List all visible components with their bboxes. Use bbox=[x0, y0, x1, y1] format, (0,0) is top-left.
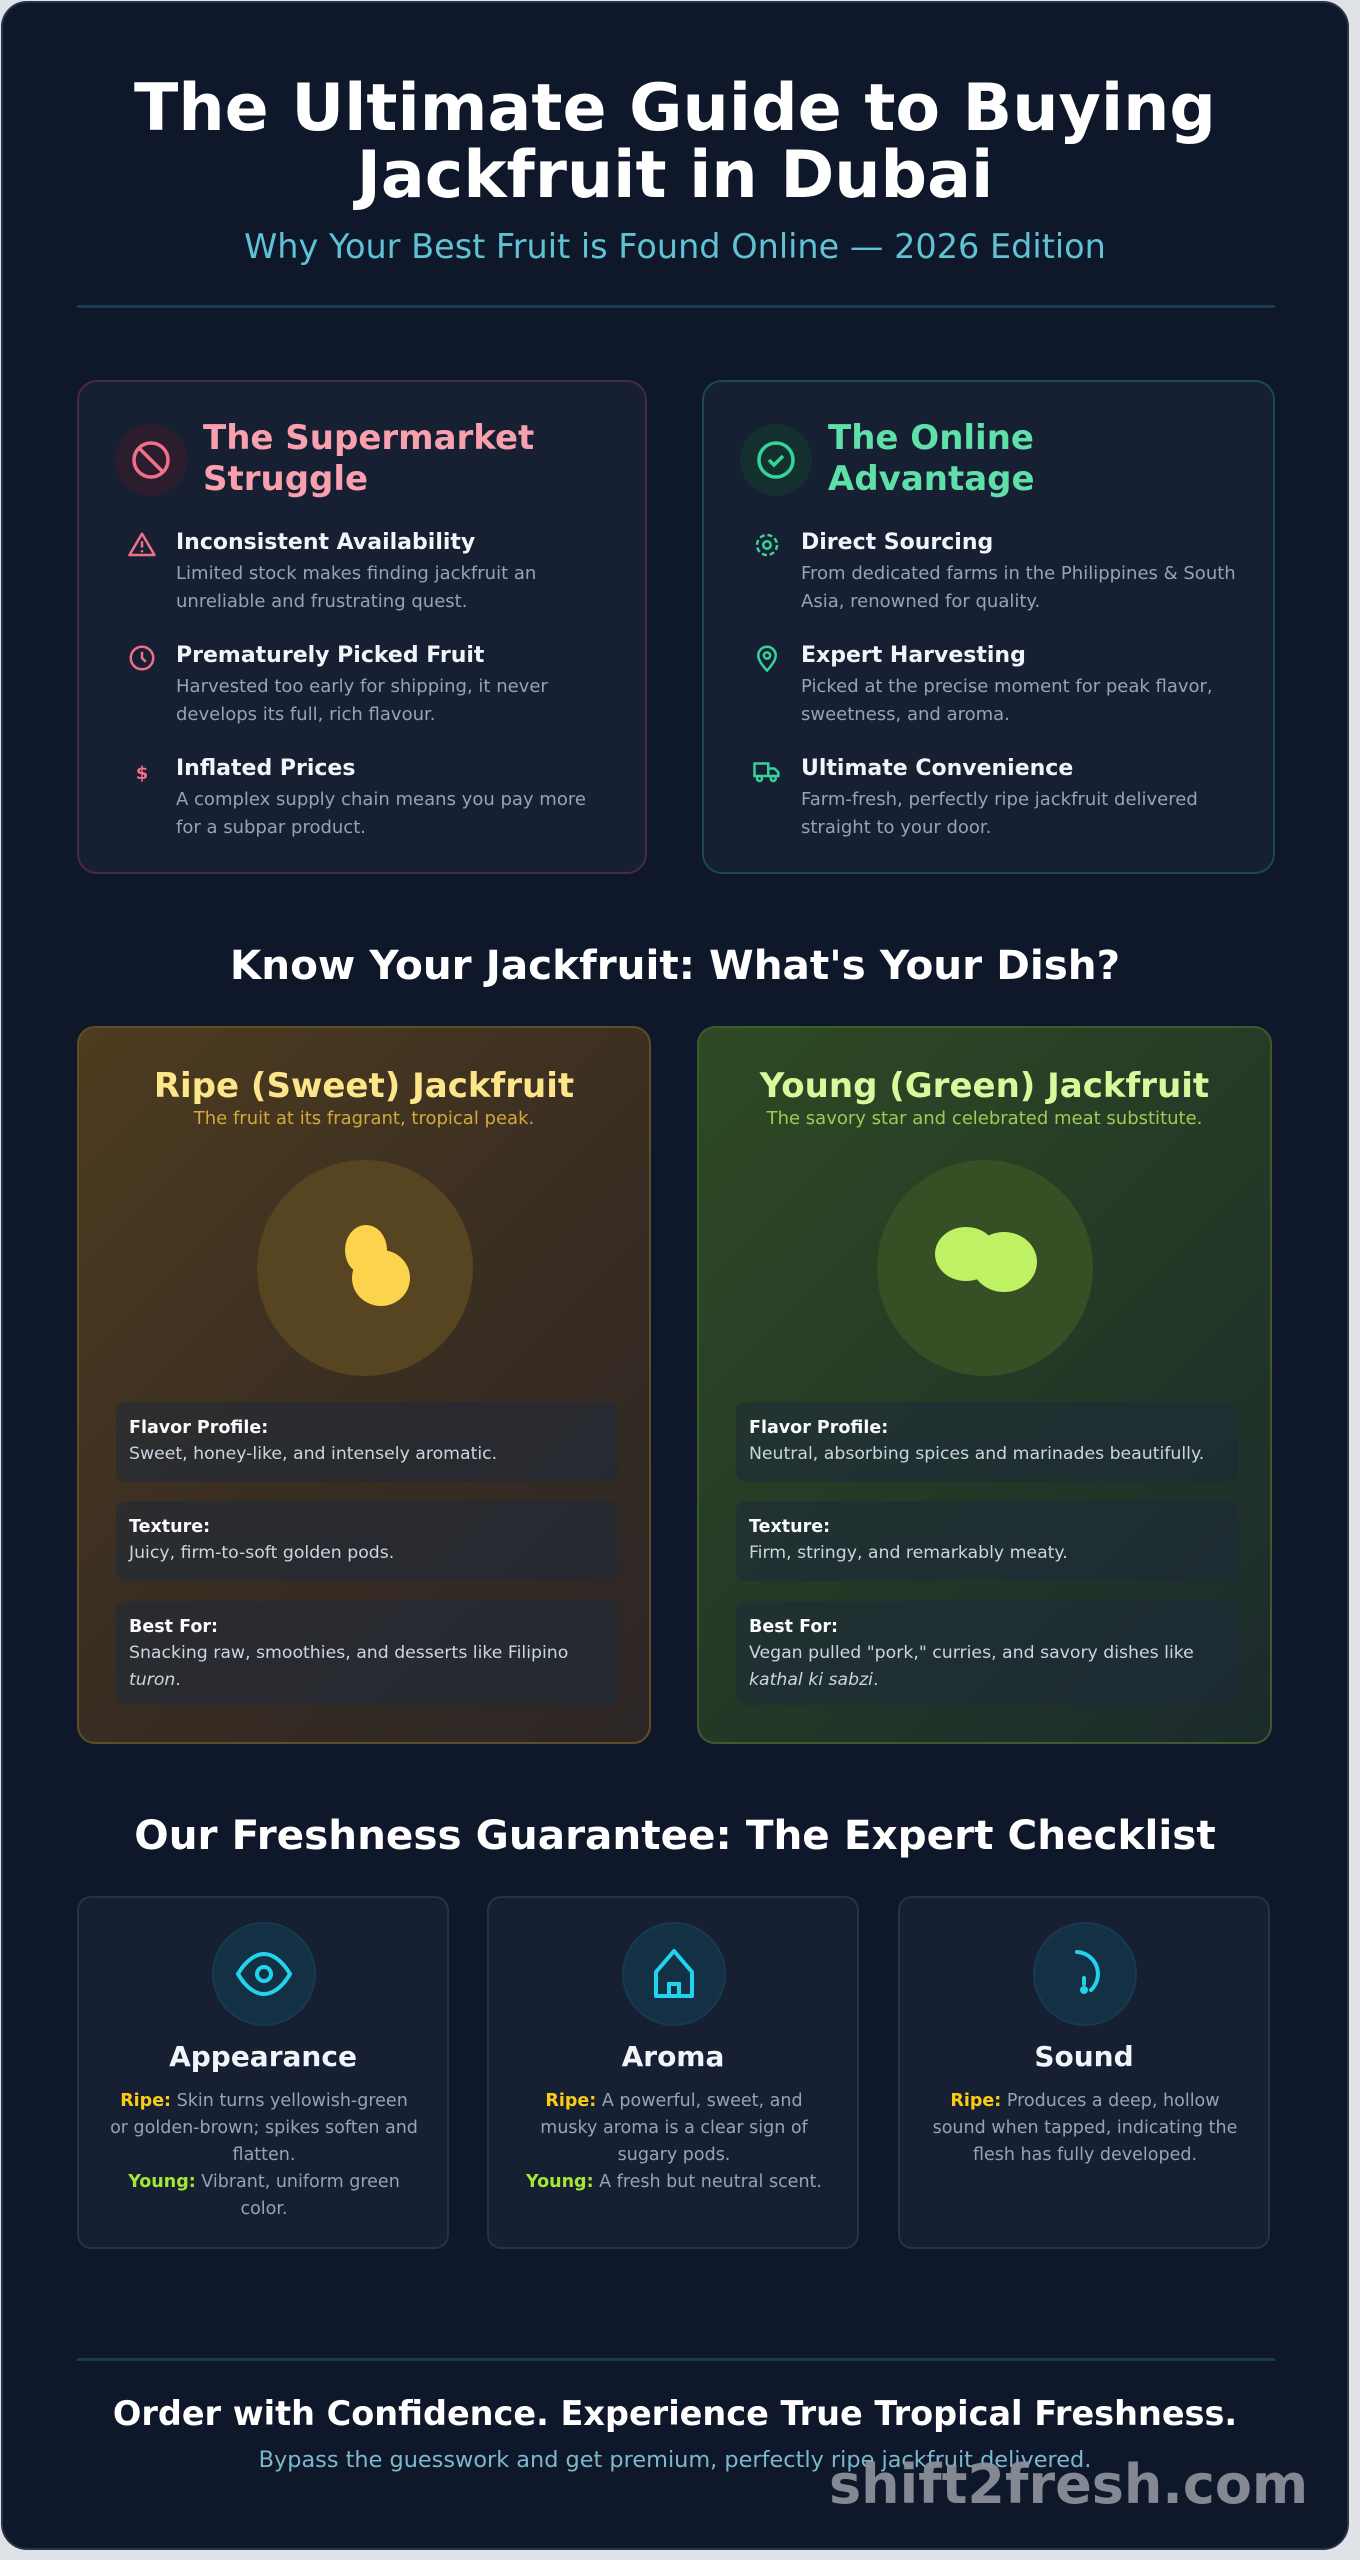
text: Young: Vibrant, uniform green color. bbox=[128, 2172, 400, 2219]
info: best for bbox=[116, 1601, 618, 1705]
info: best for: Best For: bbox=[749, 1617, 838, 1637]
item: sourcing: Direct Sourcing bbox=[801, 530, 993, 555]
item: convenience: Farm-fresh, perfectly ripe jackfruit delivered straight to your door. bbox=[801, 789, 1198, 838]
heading: The Supermarket bbox=[203, 418, 534, 458]
text bbox=[526, 2091, 822, 2192]
info: texture bbox=[116, 1501, 618, 1581]
icon: sound bbox=[1033, 1922, 1137, 2026]
item: prices: Inflated Prices bbox=[176, 756, 355, 781]
icon: eye bbox=[212, 1922, 316, 2026]
item: premature: Prematurely Picked Fruit bbox=[176, 643, 484, 668]
icon: prohibited bbox=[115, 424, 187, 496]
heading: freshness guarantee: Our Freshness Guarantee: The Expert Checklist bbox=[134, 1811, 1216, 1859]
item: convenience bbox=[753, 756, 1198, 838]
item: prices bbox=[136, 756, 586, 838]
item: sourcing bbox=[756, 530, 1236, 612]
icon: ripe pods bbox=[257, 1160, 473, 1376]
info: texture: Firm, stringy, and remarkably meaty. bbox=[749, 1543, 1068, 1563]
footer subtext: Bypass the guesswork and get premium, perfectly ripe jackfruit delivered. bbox=[259, 2447, 1091, 2473]
heading bbox=[828, 418, 1035, 499]
info: best for: Snacking raw, smoothies, and desserts like Filipino turon. bbox=[129, 1643, 568, 1690]
info: best for: Vegan pulled "pork," curries, and savory dishes like kathal ki sabzi. bbox=[749, 1643, 1194, 1690]
item: prices: A complex supply chain means you pay more for a subpar product. bbox=[176, 789, 586, 838]
heading: The Online bbox=[828, 418, 1034, 458]
info: texture bbox=[736, 1501, 1238, 1581]
info: flavor: Flavor Profile: bbox=[749, 1418, 888, 1438]
info: texture: Juicy, firm-to-soft golden pods. bbox=[129, 1543, 394, 1563]
subtitle: The fruit at its fragrant, tropical peak. bbox=[194, 1108, 534, 1129]
panel: online advantage bbox=[702, 380, 1275, 874]
panel: appearance bbox=[77, 1896, 449, 2249]
item: sourcing: From dedicated farms in the Philippines & South Asia, renowned for quality. bbox=[801, 563, 1236, 612]
subtitle: The savory star and celebrated meat substitute. bbox=[767, 1108, 1202, 1129]
info: texture: Texture: bbox=[749, 1517, 830, 1537]
icon: green pods bbox=[877, 1160, 1093, 1376]
panel: sound bbox=[898, 1896, 1270, 2249]
title: Appearance bbox=[169, 2040, 357, 2073]
info: flavor: Sweet, honey-like, and intensely aromatic. bbox=[129, 1444, 497, 1464]
text: Ripe: Produces a deep, hollow sound when tapped, indicating the flesh has fully developed. bbox=[933, 2091, 1237, 2165]
text: Ripe: A powerful, sweet, and musky aroma is a clear sign of sugary pods. bbox=[540, 2091, 808, 2165]
text: Young: A fresh but neutral scent. bbox=[526, 2172, 822, 2192]
info: texture: Texture: bbox=[129, 1517, 210, 1537]
heading: Advantage bbox=[828, 459, 1035, 499]
heading: Struggle bbox=[203, 459, 368, 499]
info: best for bbox=[736, 1601, 1238, 1705]
panel: young jackfruit bbox=[697, 1026, 1272, 1744]
title: The Ultimate Guide to Buying bbox=[134, 71, 1216, 146]
info: flavor: Neutral, absorbing spices and marinades beautifully. bbox=[749, 1444, 1204, 1464]
title: Young (Green) Jackfruit bbox=[760, 1066, 1209, 1106]
text bbox=[110, 2091, 418, 2219]
item: convenience: Ultimate Convenience bbox=[801, 756, 1073, 781]
icon: house bbox=[622, 1922, 726, 2026]
panel: supermarket struggle bbox=[77, 380, 647, 874]
item: prices: $ bbox=[136, 763, 148, 784]
watermark: shift2fresh.com bbox=[829, 2453, 1308, 2516]
text: Ripe: Skin turns yellowish-green or golden-brown; spikes soften and flatten. bbox=[110, 2091, 418, 2165]
info: flavor: Flavor Profile: bbox=[129, 1418, 268, 1438]
title: Sound bbox=[1034, 2040, 1134, 2073]
item: premature: Harvested too early for shipping, it never develops its full, rich flavour. bbox=[176, 676, 548, 725]
item: harvesting: Expert Harvesting bbox=[801, 643, 1026, 668]
info: best for: Best For: bbox=[129, 1617, 218, 1637]
panel: ripe jackfruit bbox=[77, 1026, 651, 1744]
subtitle: Why Your Best Fruit is Found Online — 2026 Edition bbox=[244, 227, 1106, 266]
item: availability bbox=[128, 530, 536, 612]
item: harvesting bbox=[757, 643, 1213, 725]
heading bbox=[203, 418, 534, 499]
item: premature bbox=[130, 643, 548, 725]
footer heading: Order with Confidence. Experience True Tropical Freshness. bbox=[113, 2394, 1237, 2433]
title: Ripe (Sweet) Jackfruit bbox=[154, 1066, 574, 1106]
item: availability: Limited stock makes finding jackfruit an unreliable and frustrating quest. bbox=[176, 563, 536, 612]
info: flavor bbox=[116, 1402, 618, 1482]
title: Aroma bbox=[622, 2040, 724, 2073]
title bbox=[134, 71, 1216, 213]
heading: know your jackfruit: Know Your Jackfruit: What's Your Dish? bbox=[230, 941, 1120, 989]
icon: check bbox=[740, 424, 812, 496]
panel: aroma bbox=[487, 1896, 859, 2249]
item: harvesting: Picked at the precise moment for peak flavor, sweetness, and aroma. bbox=[801, 676, 1213, 725]
item: availability: Inconsistent Availability bbox=[176, 530, 475, 555]
info: flavor bbox=[736, 1402, 1238, 1482]
title: Jackfruit in Dubai bbox=[357, 138, 993, 213]
